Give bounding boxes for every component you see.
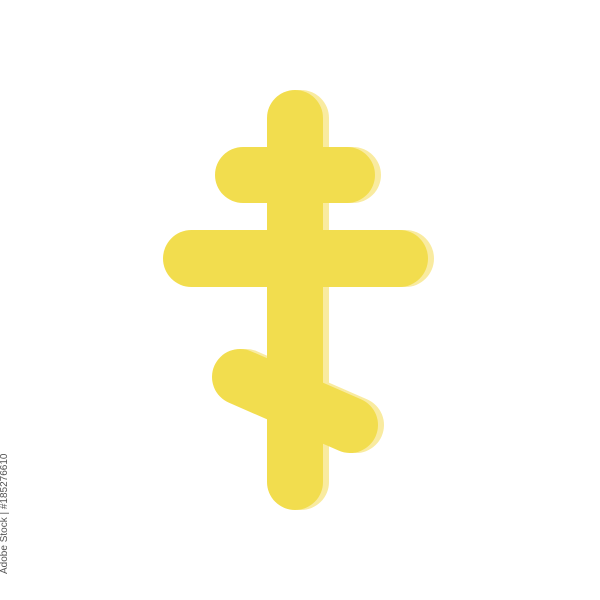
cross shadow	[169, 90, 434, 510]
cross main	[163, 90, 428, 510]
